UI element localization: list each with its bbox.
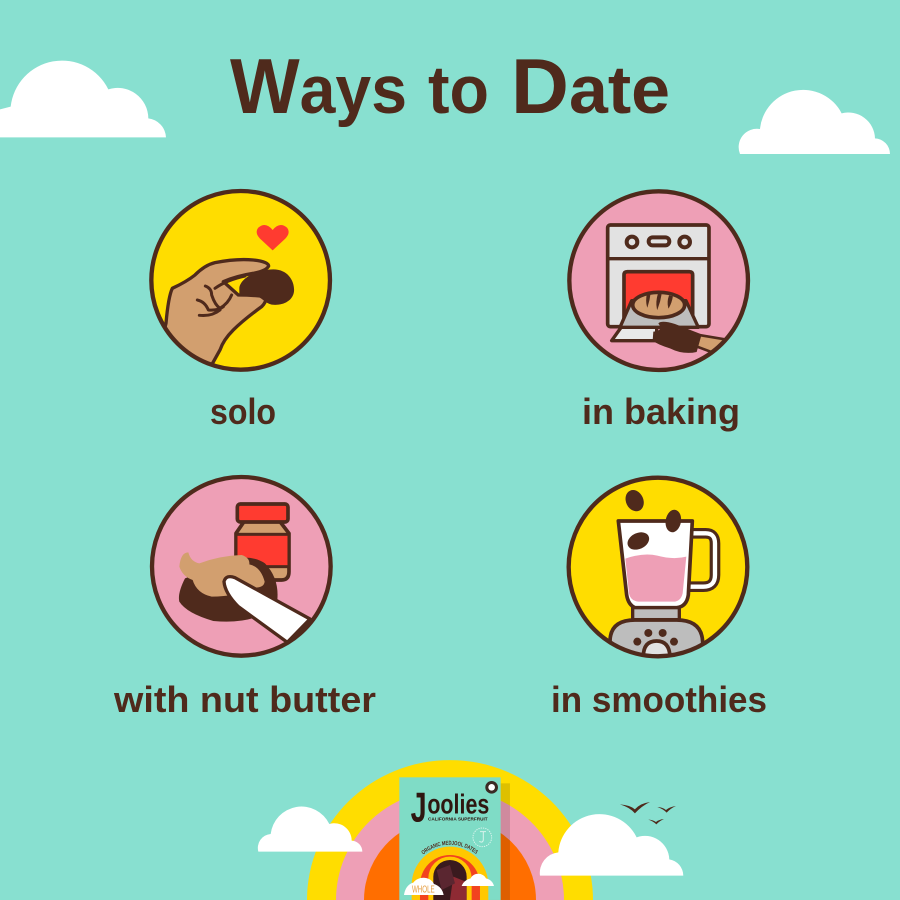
blender handle bbox=[689, 533, 715, 587]
date bbox=[179, 558, 278, 622]
cloud: top right bbox=[739, 90, 890, 154]
blender base bbox=[608, 618, 704, 653]
arm bbox=[698, 334, 724, 352]
box logo: joolies: J bbox=[411, 783, 427, 830]
box text: whole: WHOLE bbox=[412, 885, 435, 896]
ring bbox=[569, 478, 747, 656]
box text: california superfruit: CALIFORNIA SUPERFRUIT bbox=[428, 816, 488, 821]
oven opening bbox=[624, 272, 693, 327]
date bbox=[239, 269, 294, 305]
oven door bbox=[612, 327, 657, 341]
certification stamp bbox=[473, 828, 492, 847]
ring bbox=[151, 191, 330, 370]
label: solo: solo bbox=[210, 391, 276, 432]
ring bbox=[152, 477, 331, 656]
title: Date bbox=[511, 42, 670, 130]
title bbox=[230, 42, 670, 130]
yellow disc bbox=[151, 190, 331, 370]
knife bbox=[224, 577, 310, 642]
smoothie bbox=[625, 555, 686, 602]
blender dial bbox=[643, 641, 670, 657]
blender jug bbox=[618, 521, 692, 608]
pink disc bbox=[569, 191, 749, 371]
oven knobs bbox=[627, 237, 690, 247]
ring bbox=[569, 191, 748, 370]
heart bbox=[257, 225, 289, 250]
blender buttons bbox=[633, 629, 678, 646]
box art arches bbox=[404, 847, 494, 900]
rainbow bbox=[307, 760, 593, 900]
yellow disc bbox=[568, 477, 748, 657]
icon: with nut butter bbox=[151, 476, 331, 656]
box cloud left bbox=[404, 878, 444, 895]
jar body bbox=[236, 522, 289, 580]
organic seal bbox=[485, 781, 498, 794]
label: in smoothies: in smoothies bbox=[551, 679, 767, 720]
finger creases bbox=[197, 276, 245, 316]
oven body bbox=[608, 225, 709, 327]
pink disc bbox=[151, 476, 331, 656]
jar lid bbox=[237, 504, 288, 522]
bread bbox=[633, 292, 685, 318]
blender neck bbox=[633, 608, 679, 620]
icon: solo, hand holding date bbox=[151, 190, 331, 370]
cloud: bottom left bbox=[258, 807, 362, 852]
icon: in baking, oven with bread bbox=[569, 191, 749, 371]
box logo: joolies: oolies bbox=[427, 788, 489, 819]
box shadow bbox=[501, 783, 510, 900]
icon: in smoothies, blender bbox=[568, 477, 748, 668]
product box and clouds bbox=[258, 777, 684, 900]
box front bbox=[399, 777, 501, 900]
box cloud right bbox=[462, 874, 494, 886]
label: in baking: in baking bbox=[582, 391, 740, 432]
title: Ways bbox=[230, 42, 407, 130]
cloud: top left bbox=[0, 61, 166, 137]
title: to bbox=[428, 52, 489, 128]
tray bbox=[620, 301, 698, 327]
dates in window bbox=[437, 865, 470, 900]
falling dates bbox=[622, 487, 683, 553]
birds bbox=[620, 802, 676, 824]
box text: organic medjool dates: ORGANIC MEDJOOL DATES bbox=[422, 840, 478, 854]
jar label bbox=[236, 534, 289, 567]
cloud: bottom right bbox=[540, 814, 683, 876]
oven mitt bbox=[653, 322, 702, 353]
nut butter bbox=[179, 552, 265, 597]
label: with nut butter: with nut butter bbox=[113, 679, 376, 720]
hand bbox=[160, 260, 269, 367]
